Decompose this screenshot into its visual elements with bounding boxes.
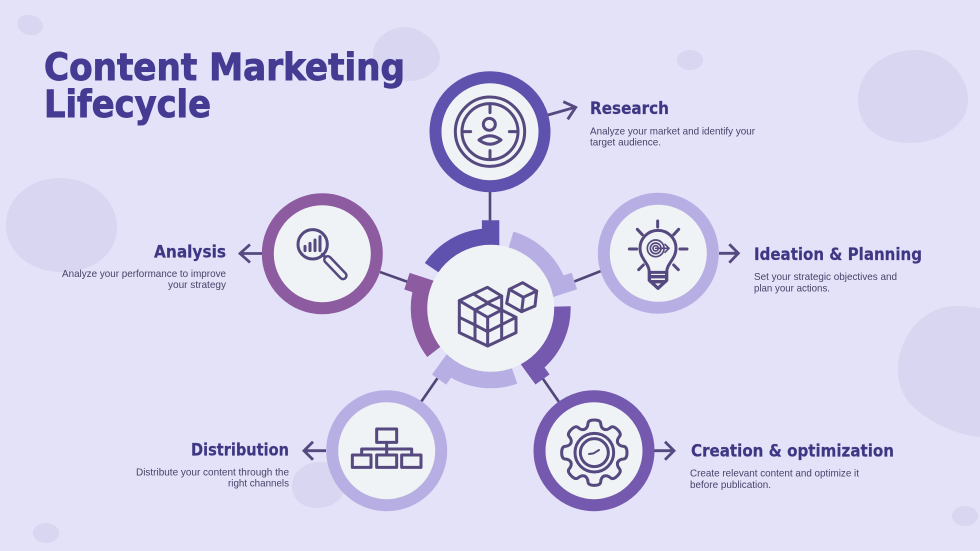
node: creation and optimization (540, 396, 894, 505)
heading: Ideation & Planning (754, 245, 922, 265)
node: ideation and planning (604, 199, 922, 308)
arc: research (425, 220, 499, 274)
ring (332, 396, 441, 505)
heading: Distribution (191, 441, 289, 461)
description (136, 467, 289, 490)
description: Set your strategic objectives and (754, 271, 897, 283)
description (62, 268, 227, 291)
arc: distribution (432, 331, 524, 418)
heading: Research (590, 99, 669, 119)
icon: magnifier with bars (298, 230, 343, 276)
title: Lifecycle (44, 83, 211, 126)
description: Create relevant content and optimize it (690, 468, 859, 480)
title: Content Marketing (44, 46, 405, 89)
arrow (654, 442, 674, 460)
description: before publication. (690, 479, 771, 491)
central hub (387, 218, 596, 418)
connector lines (380, 190, 601, 402)
ring (436, 77, 544, 186)
description: target audience. (590, 136, 661, 148)
arrow (548, 102, 576, 119)
description (754, 271, 897, 295)
description (590, 125, 755, 148)
hub disc (427, 245, 554, 372)
icon: cubes (459, 283, 537, 346)
description (690, 468, 859, 491)
ring (268, 199, 377, 308)
arrow (719, 244, 738, 263)
description: right channels (228, 478, 289, 490)
heading: Analysis (154, 243, 226, 263)
ring (540, 396, 648, 505)
heading: Creation & optimization (691, 442, 894, 462)
ring (604, 199, 713, 308)
icon: light bulb with target (629, 221, 687, 288)
description: plan your actions. (754, 283, 830, 295)
icon: target person (455, 97, 525, 166)
node: analysis (62, 199, 377, 308)
description: Analyze your performance to improve (62, 268, 226, 280)
icon: hierarchy chart (352, 429, 421, 467)
arrow (304, 442, 326, 460)
description: Distribute your content through the (136, 467, 289, 479)
node: research (436, 77, 755, 186)
title (44, 46, 405, 126)
icon: gear with clock (562, 420, 627, 485)
description: Analyze your market and identify your (590, 125, 755, 137)
arc: analysis (387, 273, 461, 360)
node: distribution (136, 396, 441, 505)
description: your strategy (168, 279, 227, 291)
arc: creation (504, 297, 596, 385)
arc: ideation (503, 218, 577, 306)
arrow (240, 244, 262, 262)
